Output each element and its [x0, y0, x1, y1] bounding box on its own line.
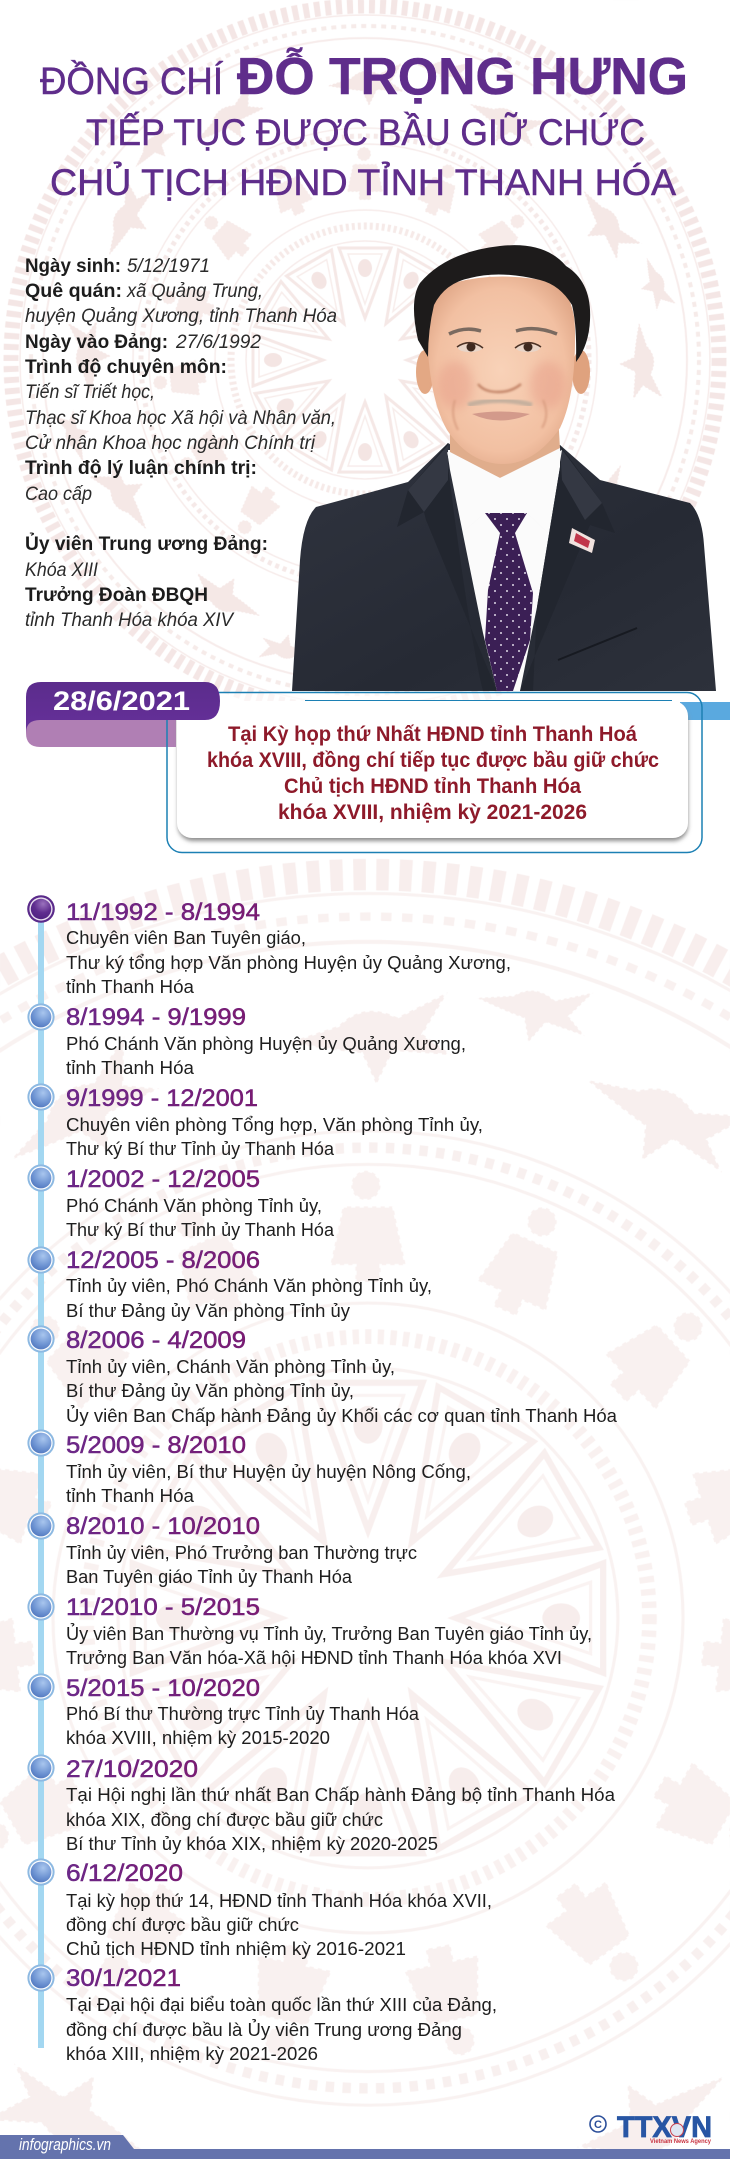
entry 8: [27, 1512, 417, 1587]
pocket: [558, 628, 637, 660]
cheeks: [437, 361, 566, 409]
shirt: [447, 430, 562, 691]
entry 10: Phó Bí thư Thường trực Tỉnh ủy Thanh Hóa: [66, 1704, 420, 1724]
entry 11: khóa XIX, đồng chí được bầu giữ chức: [66, 1810, 383, 1830]
biography text block: Thạc sĩ Khoa học Xã hội và Nhân văn,: [25, 408, 336, 429]
entry 6: 8/2006 - 4/2009: [66, 1327, 246, 1354]
entry 9: Trưởng Ban Văn hóa-Xã hội HĐND tỉnh Thanh Hóa khóa XVI: [66, 1648, 562, 1668]
entry 3: [27, 1083, 483, 1159]
tab underside: [26, 712, 176, 747]
entry 13: Tại Đại hội đại biểu toàn quốc lần thứ XIII của Đảng,: [66, 1995, 497, 2015]
entry 13: [27, 1964, 497, 2064]
entry 1: [27, 895, 511, 997]
white card: [177, 701, 688, 838]
entry 7: 5/2009 - 8/2010: [66, 1432, 246, 1459]
lips: [472, 412, 530, 420]
entry 6: [27, 1325, 618, 1426]
date tab: [26, 682, 220, 733]
box outline: [167, 692, 702, 852]
card top line: [305, 700, 672, 702]
date callout: [26, 682, 730, 852]
shadow of card: [178, 706, 688, 841]
entry 2: Phó Chánh Văn phòng Huyện ủy Quảng Xương,: [66, 1034, 466, 1054]
biography text block: Cử nhân Khoa học ngành Chính trị: [25, 433, 316, 454]
biography text block: 5/12/1971: [127, 256, 210, 277]
title: CHỦ TỊCH HĐND TỈNH THANH HÓA: [50, 161, 676, 203]
ears: [416, 350, 434, 394]
entry 8: Ban Tuyên giáo Tỉnh ủy Thanh Hóa: [66, 1567, 353, 1587]
entry 2: 8/1994 - 9/1999: [66, 1004, 246, 1031]
callout text: [207, 723, 659, 824]
entry 12: Tại kỳ họp thứ 14, HĐND tỉnh Thanh Hóa khóa XVII,: [66, 1891, 492, 1911]
biography text block: xã Quảng Trung,: [126, 281, 263, 302]
eyes: [457, 342, 541, 352]
entry 10: khóa XVIII, nhiệm kỳ 2015-2020: [66, 1728, 330, 1748]
entry 4: [27, 1164, 335, 1240]
TTXVN logo: C: [594, 2119, 602, 2131]
entry 13: đồng chí được bầu là Ủy viên Trung ương Đảng: [66, 2019, 462, 2040]
outlined box: [167, 692, 702, 852]
entry 11: Tại Hội nghị lần thứ nhất Ban Chấp hành Đảng bộ tỉnh Thanh Hóa: [66, 1785, 616, 1805]
TTXVN logo: Vietnam News Agency: [650, 2138, 711, 2145]
biography text block: Cao cấp: [25, 484, 92, 505]
entry 5: Tỉnh ủy viên, Phó Chánh Văn phòng Tỉnh ủy,: [66, 1276, 432, 1296]
entry 4: Thư ký Bí thư Tỉnh ủy Thanh Hóa: [66, 1220, 335, 1240]
entry 4: 1/2002 - 12/2005: [66, 1166, 260, 1193]
biography text block: Ngày vào Đảng:: [25, 332, 168, 353]
entry 12: đồng chí được bầu giữ chức: [66, 1915, 299, 1935]
biography text block: Ngày sinh:: [25, 256, 121, 277]
title: TIẾP TỤC ĐƯỢC BẦU GIỮ CHỨC: [86, 112, 645, 153]
entry 11: Bí thư Tỉnh ủy khóa XIX, nhiệm kỳ 2020-2025: [66, 1834, 438, 1854]
eyebrows: [449, 329, 481, 334]
entry 11: 27/10/2020: [66, 1756, 198, 1783]
entry 8: Tỉnh ủy viên, Phó Trưởng ban Thường trực: [66, 1543, 417, 1563]
entry 5: [27, 1246, 432, 1321]
entry 10: 5/2015 - 10/2020: [66, 1675, 260, 1702]
entry 13: khóa XIII, nhiệm kỳ 2021-2026: [66, 2044, 318, 2064]
face: [427, 276, 575, 464]
biography text block: Khóa XIII: [25, 560, 99, 581]
portrait photo: [292, 245, 716, 691]
callout text: Chủ tịch HĐND tỉnh Thanh Hóa: [284, 775, 581, 798]
entry 13: 30/1/2021: [66, 1965, 181, 1992]
entry 3: Thư ký Bí thư Tỉnh ủy Thanh Hóa: [66, 1139, 335, 1159]
entry 7: [27, 1429, 471, 1506]
timeline line: [38, 909, 44, 2048]
TTXVN logo: TTXVN: [617, 2111, 712, 2144]
biography text block: tỉnh Thanh Hóa khóa XIV: [25, 610, 235, 631]
entry 1: Thư ký tổng hợp Văn phòng Huyện ủy Quảng Xương,: [66, 953, 511, 973]
entry 6: Tỉnh ủy viên, Chánh Văn phòng Tỉnh ủy,: [66, 1357, 395, 1377]
entry 2: [27, 1003, 466, 1078]
left lapel: [397, 443, 497, 691]
entry 3: 9/1999 - 12/2001: [66, 1085, 258, 1112]
title: ĐỖ TRỌNG HƯNG: [237, 47, 688, 106]
neck: [450, 415, 560, 478]
entry 1: Chuyên viên Ban Tuyên giáo,: [66, 928, 306, 948]
date text: 28/6/2021: [53, 686, 190, 716]
entry 1: 11/1992 - 8/1994: [66, 899, 260, 926]
callout text: khóa XVIII, đồng chí tiếp tục được bầu giữ chức: [207, 749, 659, 772]
entry 9: 11/2010 - 5/2015: [66, 1594, 260, 1621]
entry 7: Tỉnh ủy viên, Bí thư Huyện ủy huyện Nông Cống,: [66, 1462, 471, 1482]
entry 6: Ủy viên Ban Chấp hành Đảng ủy Khối các cơ quan tỉnh Thanh Hóa: [66, 1405, 618, 1426]
moustache: [468, 400, 532, 405]
entry 7: tỉnh Thanh Hóa: [66, 1486, 195, 1506]
entry 5: 12/2005 - 8/2006: [66, 1247, 260, 1274]
hair: [414, 245, 590, 362]
entry 11: [27, 1754, 616, 1854]
entry 3: Chuyên viên phòng Tổng hợp, Văn phòng Tỉnh ủy,: [66, 1115, 483, 1135]
entry 9: [27, 1593, 592, 1668]
callout text: Tại Kỳ họp thứ Nhất HĐND tỉnh Thanh Hoá: [228, 723, 637, 746]
footer bar: [0, 2135, 730, 2159]
entry 2: tỉnh Thanh Hóa: [66, 1058, 195, 1078]
biography text block: 27/6/1992: [175, 332, 261, 353]
lapel pin: [569, 528, 595, 553]
entry 6: Bí thư Đảng ủy Văn phòng Tỉnh ủy,: [66, 1381, 354, 1401]
entry 4: Phó Chánh Văn phòng Tỉnh ủy,: [66, 1196, 322, 1216]
biography text block: Trình độ lý luận chính trị:: [25, 458, 257, 479]
biography text block: Ủy viên Trung ương Đảng:: [25, 533, 268, 555]
entry 9: Ủy viên Ban Thường vụ Tỉnh ủy, Trưởng Ban Tuyên giáo Tỉnh ủy,: [66, 1623, 592, 1644]
entry 1: tỉnh Thanh Hóa: [66, 977, 195, 997]
biography text block: Trưởng Đoàn ĐBQH: [25, 585, 208, 606]
right lapel: [520, 445, 615, 691]
nose: [453, 384, 546, 430]
blue corner strip: [680, 702, 730, 720]
biography text block: Quê quán:: [25, 281, 122, 302]
entry 5: Bí thư Đảng ủy Văn phòng Tỉnh ủy: [66, 1301, 350, 1321]
biography text block: huyện Quảng Xương, tỉnh Thanh Hóa: [25, 306, 337, 327]
title: [40, 47, 688, 203]
biography text block: [25, 256, 337, 631]
career timeline: [27, 895, 618, 2064]
entry 12: 6/12/2020: [66, 1860, 183, 1887]
title: ĐỒNG CHÍ: [40, 59, 223, 103]
footer bar: infographics.vn: [19, 2135, 111, 2154]
suit jacket: [292, 443, 716, 691]
entry 12: Chủ tịch HĐND tỉnh nhiệm kỳ 2016-2021: [66, 1939, 406, 1959]
entry 10: [27, 1673, 420, 1748]
entry 12: [27, 1858, 492, 1959]
entry 8: 8/2010 - 10/2010: [66, 1513, 260, 1540]
tie: [485, 503, 533, 691]
biography text block: Trình độ chuyên môn:: [25, 357, 227, 378]
biography text block: Tiến sĩ Triết học,: [25, 382, 155, 403]
callout text: khóa XVIII, nhiệm kỳ 2021-2026: [278, 801, 587, 824]
